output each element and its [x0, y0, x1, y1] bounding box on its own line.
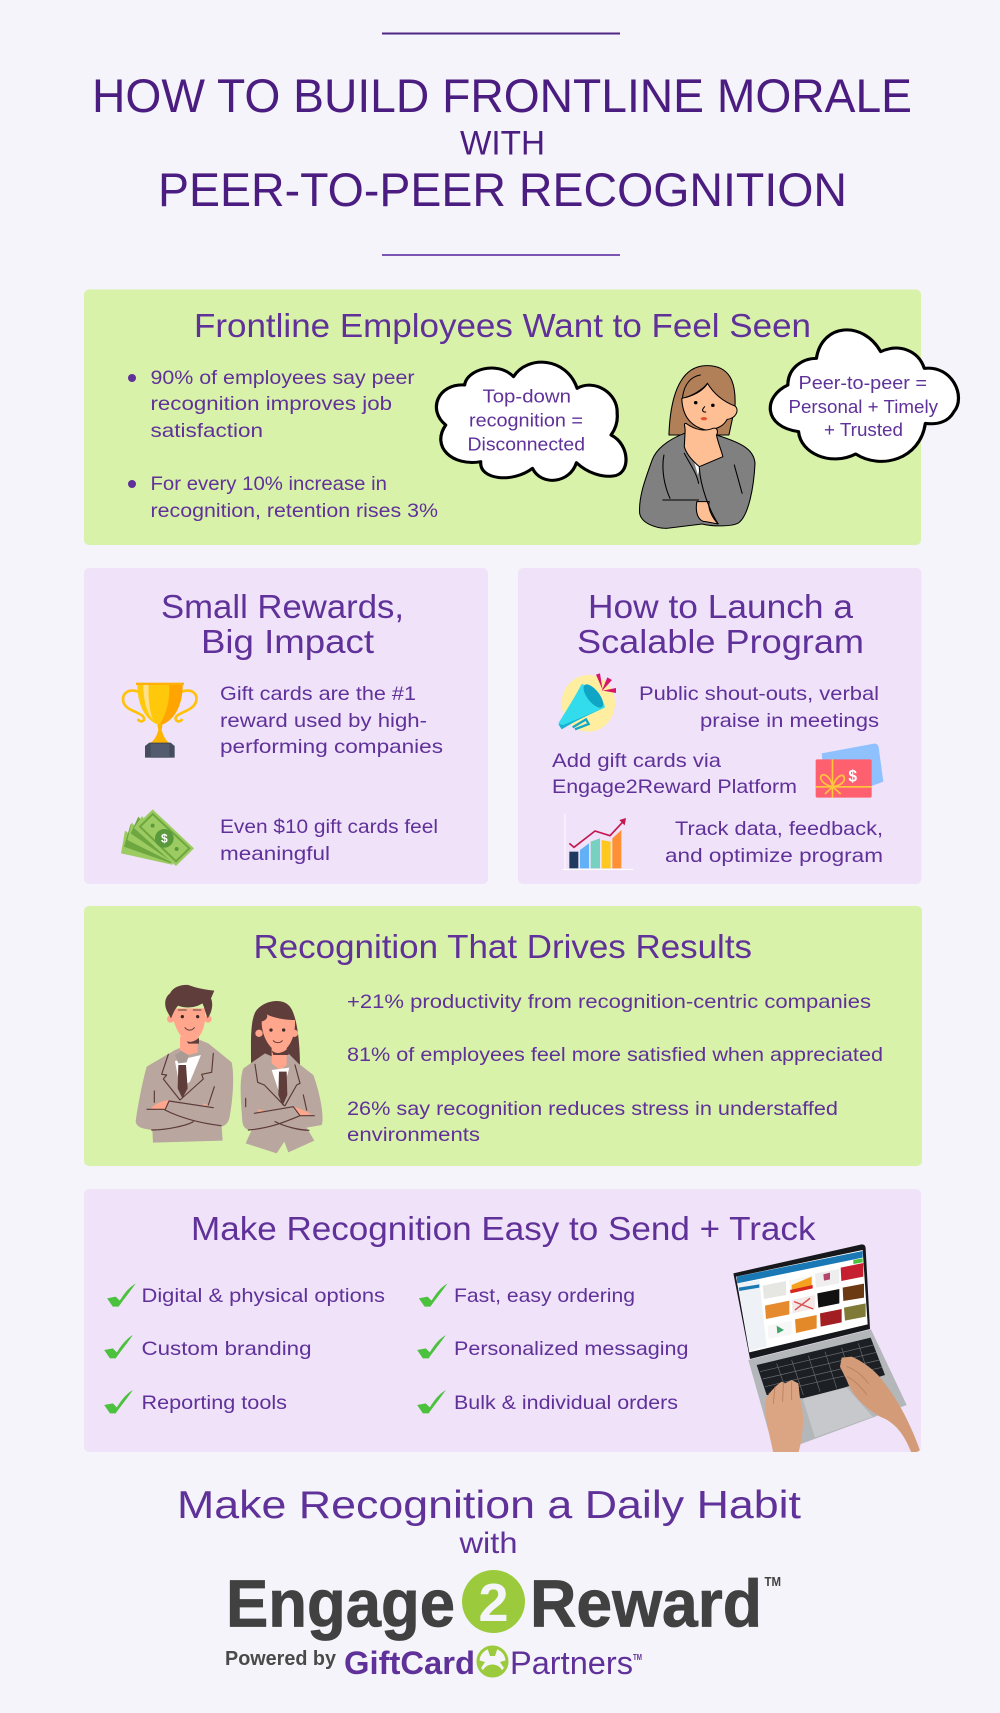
panel: recognition that drives results: [84, 906, 922, 1166]
callout: top-down recognition: Disconnected: [468, 434, 585, 454]
icon: gift card: $: [848, 767, 858, 786]
panel: small rewards, big impact: [84, 568, 488, 884]
heading: Make Recognition Easy to Send + Track: [191, 1210, 816, 1247]
heading: Recognition That Drives Results: [254, 928, 752, 965]
icon: trophy: [123, 683, 196, 758]
title: HOW TO BUILD FRONTLINE MORALE: [92, 69, 912, 122]
text: even $10: meaningful: [220, 843, 330, 865]
title: WITH: [460, 124, 545, 162]
logo: powered by GiftCard Partners: Partners: [510, 1645, 633, 1681]
callout: top-down recognition: recognition =: [469, 410, 583, 430]
heading: Frontline Employees Want to Feel Seen: [194, 307, 811, 344]
logo: Engage2Reward: Reward: [530, 1566, 762, 1642]
panel: make recognition easy to send + track: [84, 1189, 921, 1453]
feature list: [142, 1285, 688, 1414]
icon: money: [121, 809, 194, 866]
callout: peer-to-peer: Personal + Timely: [788, 396, 939, 417]
feature list: Bulk & individual orders: [454, 1392, 678, 1414]
logo: Engage2Reward: Engage: [226, 1566, 455, 1642]
feature list: Custom branding: [142, 1338, 312, 1360]
bottom divider: [382, 254, 620, 256]
callout: top-down recognition: Top-down: [482, 386, 571, 406]
icon: money: $: [161, 832, 168, 846]
stat list: environments: [347, 1124, 480, 1146]
text: gift cards: Gift cards are the #1: [220, 683, 416, 705]
icon: man and woman in suits: [136, 985, 323, 1153]
heading: Big Impact: [201, 623, 374, 660]
logo: Engage2Reward: [226, 1566, 781, 1642]
logo: powered by GiftCard Partners: [225, 1645, 642, 1681]
icons: check marks: [104, 1283, 448, 1413]
text: public shout-outs: [639, 683, 879, 732]
text: public shout-outs: Public shout-outs, verbal: [639, 683, 879, 705]
panel: frontline employees want to feel seen: [84, 290, 958, 545]
bullet list: recognition, retention rises 3%: [150, 500, 438, 522]
text: add gift cards: Add gift cards via: [552, 750, 721, 772]
title: [92, 69, 912, 216]
icon: megaphone: [558, 673, 616, 732]
closing heading: [177, 1484, 801, 1560]
stat list: 26% say recognition reduces stress in understaffed: [347, 1098, 838, 1120]
feature list: Personalized messaging: [454, 1338, 688, 1360]
text: add gift cards: Engage2Reward Platform: [552, 776, 797, 798]
icon: growth chart: [563, 813, 633, 869]
icon: gift card: [816, 744, 883, 798]
text: track data: [665, 818, 883, 867]
bullet list: 90% of employees say peer: [150, 367, 415, 389]
heading: How to Launch a: [588, 588, 854, 625]
logo: powered by GiftCard Partners: TM: [633, 1653, 642, 1662]
heading: [577, 588, 864, 660]
text: even $10: Even $10 gift cards feel: [220, 816, 438, 838]
text: gift cards: reward used by high-: [220, 710, 427, 732]
text: gift cards: performing companies: [220, 736, 443, 758]
heading: Small Rewards,: [161, 588, 404, 625]
title: PEER-TO-PEER RECOGNITION: [158, 163, 847, 216]
logo: Engage2Reward: 2: [478, 1573, 509, 1633]
text: gift cards: [220, 683, 443, 758]
bullet list: satisfaction: [150, 420, 263, 442]
text: add gift cards: [552, 750, 797, 798]
callout: peer-to-peer: Peer-to-peer =: [798, 372, 927, 393]
heading: Scalable Program: [577, 623, 864, 660]
feature list: Reporting tools: [142, 1392, 287, 1414]
logo: powered by GiftCard Partners: Powered by: [225, 1648, 337, 1670]
bullet list: [128, 367, 438, 522]
bullet list: For every 10% increase in: [150, 473, 387, 495]
feature list: Digital & physical options: [142, 1285, 385, 1307]
callout: peer-to-peer: + Trusted: [824, 419, 903, 440]
closing heading: Make Recognition a Daily Habit: [177, 1484, 801, 1527]
stat list: +21% productivity from recognition-centric companies: [347, 991, 871, 1013]
stat list: [347, 991, 883, 1146]
text: public shout-outs: praise in meetings: [700, 710, 879, 732]
text: track data: and optimize program: [665, 845, 883, 867]
icon: thinking woman: [640, 366, 755, 528]
logo: powered by GiftCard Partners: GiftCard: [344, 1645, 475, 1681]
text: track data: Track data, feedback,: [675, 818, 883, 840]
callout: peer-to-peer: [770, 330, 958, 461]
heading: [161, 588, 404, 660]
text: even $10: [220, 816, 438, 865]
bullet list: recognition improves job: [150, 393, 392, 415]
top divider: [382, 32, 620, 34]
closing heading: with: [458, 1527, 518, 1560]
logo: Engage2Reward: TM: [764, 1574, 781, 1589]
panel: how to launch a scalable program: [518, 568, 922, 884]
stat list: 81% of employees feel more satisfied when appreciated: [347, 1044, 883, 1066]
feature list: Fast, easy ordering: [454, 1285, 635, 1307]
icon: laptop with hands: [733, 1244, 921, 1453]
callout: top-down recognition: [436, 362, 626, 480]
